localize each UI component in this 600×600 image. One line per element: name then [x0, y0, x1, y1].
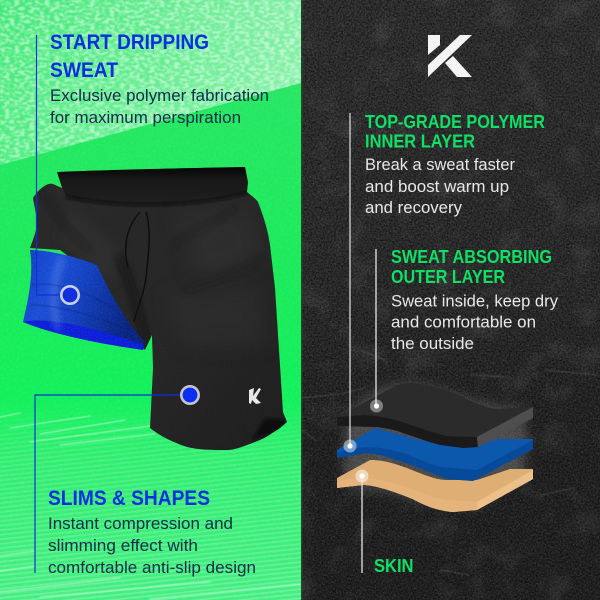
icon: K logo — [428, 35, 472, 77]
text: keep dry description: and comfortable on — [391, 314, 536, 332]
text: compression description — [48, 515, 256, 577]
text: sweat faster description: and boost warm up — [365, 178, 509, 196]
line: slims callout leader — [35, 395, 182, 573]
marker: inner layer dot — [61, 286, 79, 304]
text: keep dry description: the outside — [391, 335, 474, 353]
line: sweat callout leader — [36, 35, 62, 295]
layers glow — [345, 384, 525, 506]
heading: sweat absorbing — [391, 247, 552, 287]
black layer — [337, 383, 533, 448]
text: sweat faster description — [365, 156, 515, 217]
blue layer — [337, 428, 533, 481]
marker: shorts dot — [181, 386, 199, 404]
shorts body — [30, 167, 287, 450]
skin layer — [337, 460, 533, 512]
panel: green background — [0, 0, 301, 600]
illustration: fabric layers — [337, 383, 533, 512]
drawstring — [126, 212, 149, 322]
text: compression description: Instant compression and — [48, 515, 233, 533]
marker: outer layer dot — [370, 400, 383, 412]
text: sweat faster description: Break a sweat faster — [365, 156, 515, 174]
illustration: shorts — [20, 167, 287, 450]
heading: start dripping sweat: START DRIPPING — [50, 31, 209, 54]
heading: sweat absorbing: SWEAT ABSORBING — [391, 247, 552, 267]
small logo on shorts — [249, 388, 261, 404]
heading: top-grade polymer: INNER LAYER — [365, 132, 475, 152]
text: compression description: comfortable anti-slip design — [48, 559, 256, 577]
label: skin: SKIN — [374, 556, 414, 576]
text: polymer fabrication description — [50, 87, 269, 127]
heading: top-grade polymer — [365, 112, 545, 152]
text: sweat faster description: and recovery — [365, 199, 463, 217]
blue inner layer — [20, 250, 145, 352]
text: polymer fabrication description: for maximum perspiration — [50, 109, 241, 127]
heading: start dripping sweat — [50, 31, 209, 82]
text: keep dry description — [391, 292, 559, 353]
heading: slims and shapes: SLIMS & SHAPES — [48, 487, 210, 510]
heading: start dripping sweat: SWEAT — [50, 59, 118, 82]
panel: dark background — [301, 0, 600, 600]
text: keep dry description: Sweat inside, keep dry — [391, 292, 559, 310]
line: skin leader — [361, 476, 363, 573]
heading: sweat absorbing: OUTER LAYER — [391, 267, 505, 287]
shorts shading and folds — [42, 167, 287, 450]
marker: inner layer dot — [344, 440, 356, 452]
line: inner layer leader — [349, 113, 351, 446]
line: outer layer leader — [375, 249, 377, 406]
text: compression description: slimming effect with — [48, 537, 198, 555]
text: polymer fabrication description: Exclusive polymer fabrication — [50, 87, 269, 105]
marker: skin dot — [356, 470, 368, 482]
heading: top-grade polymer: TOP-GRADE POLYMER — [365, 112, 545, 132]
